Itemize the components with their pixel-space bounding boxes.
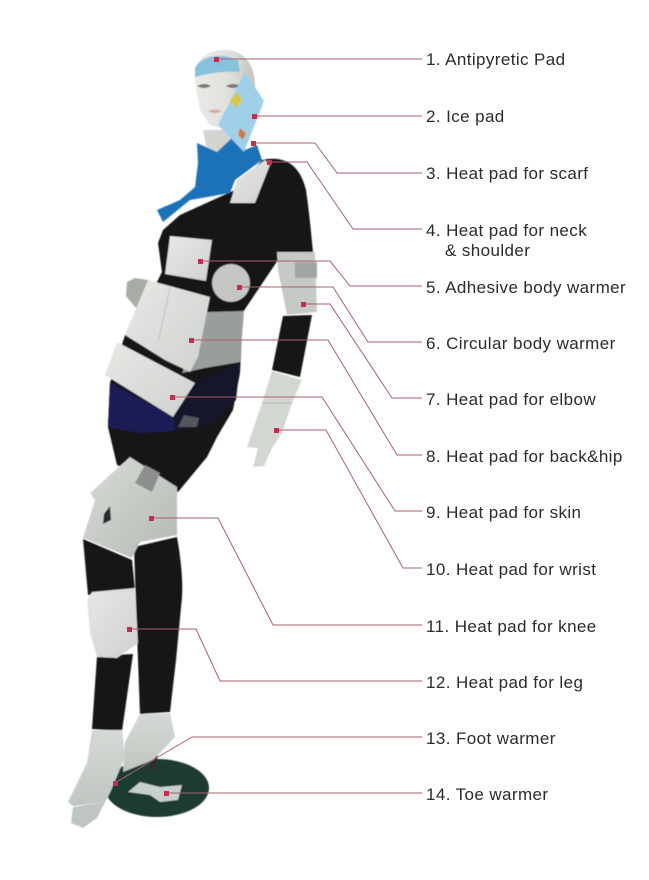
label 9: Heat pad for skin: 9. Heat pad for skin bbox=[426, 503, 581, 522]
label 1: Antipyretic Pad: 1. Antipyretic Pad bbox=[426, 50, 566, 69]
circular body warmer bbox=[212, 264, 250, 302]
head bbox=[195, 50, 255, 128]
back foot warmer bbox=[123, 713, 175, 772]
label 8: Heat pad for back&hip: 8. Heat pad for back&hip bbox=[426, 447, 623, 466]
wrist heat pad and hand bbox=[247, 371, 302, 467]
knee heat pad bbox=[83, 457, 177, 558]
label 6: Circular body warmer bbox=[237, 285, 616, 353]
label 4: Heat pad for neck & shoulder: 4. Heat pad for neck bbox=[426, 221, 587, 240]
label 5: Adhesive body warmer bbox=[198, 259, 626, 297]
display base bbox=[105, 752, 209, 817]
label 12: Heat pad for leg: 12. Heat pad for leg bbox=[426, 673, 583, 692]
label 7: Heat pad for elbow: 7. Heat pad for elbow bbox=[426, 390, 596, 409]
label 12: Heat pad for leg bbox=[127, 627, 583, 692]
label 10: Heat pad for wrist bbox=[274, 428, 596, 579]
label 11: Heat pad for knee bbox=[149, 516, 597, 636]
foot warmer bbox=[68, 730, 125, 828]
label 4: Heat pad for neck & shoulder bbox=[267, 160, 587, 260]
label 1: Antipyretic Pad bbox=[214, 50, 566, 69]
label 5: Adhesive body warmer: 5. Adhesive body warmer bbox=[426, 278, 626, 297]
back leg bbox=[134, 537, 182, 714]
toe warmer on base bbox=[128, 782, 182, 802]
shorts bbox=[108, 362, 240, 433]
antipyretic pad on forehead bbox=[195, 56, 240, 77]
right arm bbox=[272, 315, 312, 377]
shoulder heat pad bbox=[230, 160, 270, 203]
left hand bbox=[126, 278, 148, 308]
ice pad package bbox=[218, 72, 264, 152]
mannequin figure bbox=[68, 50, 317, 828]
label 2: Ice pad bbox=[252, 107, 505, 126]
label 3: Heat pad for scarf bbox=[251, 141, 588, 183]
back and hip heat pad bbox=[125, 280, 210, 372]
front calf bbox=[92, 654, 133, 731]
label 9: Heat pad for skin bbox=[170, 395, 581, 522]
label 14: Toe warmer bbox=[164, 785, 548, 804]
label 11: Heat pad for knee: 11. Heat pad for knee bbox=[426, 617, 597, 636]
elbow heat pad bbox=[277, 252, 317, 315]
label 14: Toe warmer: 14. Toe warmer bbox=[426, 785, 548, 804]
label 10: Heat pad for wrist: 10. Heat pad for wrist bbox=[426, 560, 596, 579]
skin heat pad bbox=[105, 342, 195, 417]
label 13: Foot warmer: 13. Foot warmer bbox=[426, 729, 556, 748]
midriff band bbox=[182, 311, 244, 373]
leg heat pad bbox=[87, 588, 138, 658]
neck bbox=[203, 130, 236, 154]
label 13: Foot warmer bbox=[113, 729, 556, 786]
label 8: Heat pad for back&hip bbox=[189, 338, 623, 466]
torso and legs upper bbox=[108, 159, 313, 492]
label 4: Heat pad for neck & shoulder: & shoulder bbox=[445, 241, 530, 260]
label 6: Circular body warmer: 6. Circular body warmer bbox=[426, 334, 616, 353]
scarf bbox=[157, 137, 262, 222]
label 3: Heat pad for scarf: 3. Heat pad for scarf bbox=[426, 164, 588, 183]
label 2: Ice pad: 2. Ice pad bbox=[426, 107, 505, 126]
front thigh bbox=[83, 539, 135, 595]
chest adhesive body warmer bbox=[165, 236, 212, 281]
label 7: Heat pad for elbow bbox=[301, 302, 596, 409]
